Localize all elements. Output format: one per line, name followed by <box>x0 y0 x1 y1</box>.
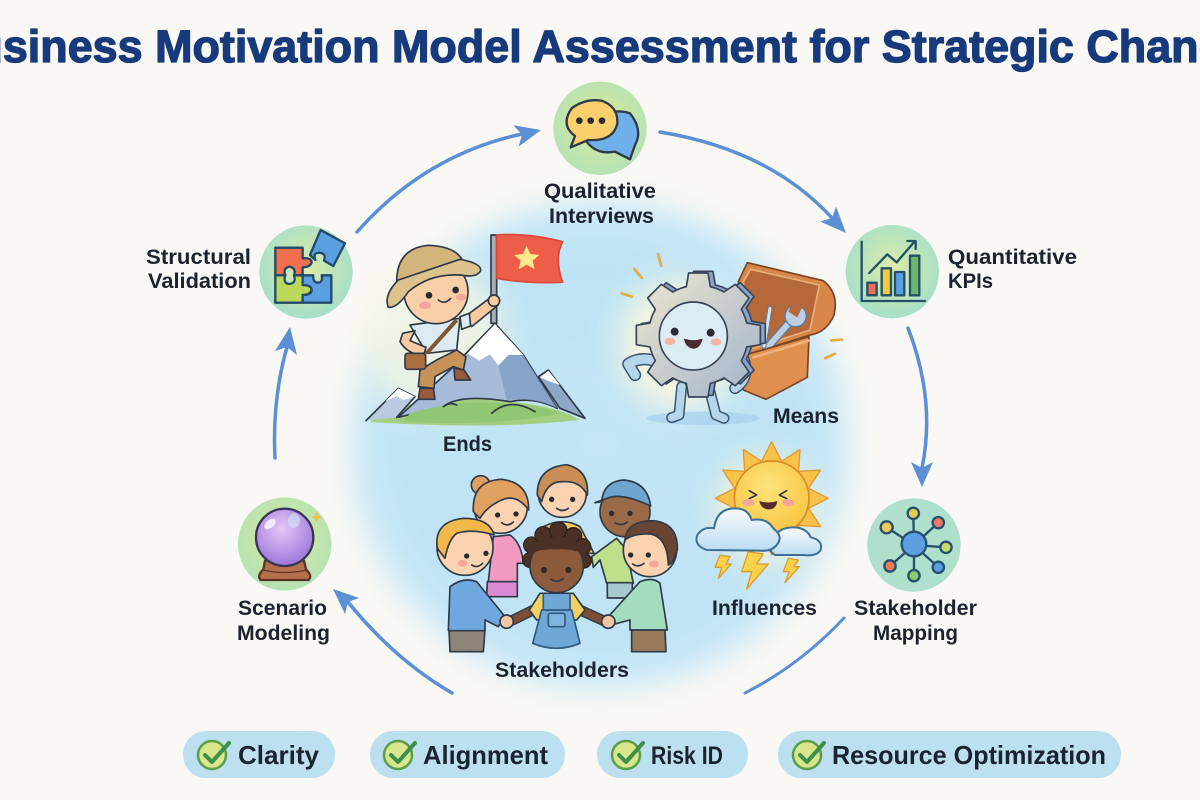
child with curly hair and overalls <box>512 522 603 648</box>
label: quantitative KPIs: KPIs <box>948 269 993 293</box>
illustration: group of children holding hands (Stakeholders) <box>437 465 677 652</box>
label: stakeholder mapping: Stakeholder <box>854 596 978 620</box>
benefit pill: resource optimization: Resource Optimization <box>832 740 1106 770</box>
child with blue cap <box>592 480 651 598</box>
label: scenario modeling: Scenario <box>238 596 327 620</box>
icon: stakeholder network <box>867 498 961 592</box>
boy in mint shirt <box>608 521 677 652</box>
benefit pill: clarity <box>183 731 335 778</box>
label: qualitative interviews: Qualitative <box>544 179 656 203</box>
girl with hair bun <box>471 476 529 597</box>
label: influences: Influences <box>712 596 817 620</box>
arrow: stakeholder mapping to scenario modeling left segment <box>333 589 452 693</box>
label: stakeholders: Stakeholders <box>495 658 629 682</box>
label: structural validation: Structural <box>146 245 251 269</box>
benefit pill: alignment <box>370 731 565 778</box>
benefit pill: resource optimization <box>778 731 1121 778</box>
label: means: Means <box>773 404 839 428</box>
benefit pill: alignment: Alignment <box>423 740 548 770</box>
arrow: scenario modeling to structural validation <box>274 327 297 458</box>
benefit pill: risk ID <box>597 731 748 778</box>
boy with yellow shirt <box>537 465 594 553</box>
icon: puzzle <box>259 225 353 319</box>
label: qualitative interviews <box>544 179 656 228</box>
label: stakeholder mapping <box>854 596 978 645</box>
illustration: gear with toolbox (Means) <box>620 253 843 425</box>
illustration: sun and storm clouds (Influences) <box>696 442 828 589</box>
central watercolor blob <box>350 200 850 690</box>
icon: crystal ball <box>238 497 331 591</box>
icon: speech bubbles <box>553 82 647 175</box>
arrow: stakeholder mapping to scenario modeling right segment <box>745 618 844 693</box>
label: stakeholder mapping: Mapping <box>873 621 958 645</box>
label: quantitative KPIs: Quantitative <box>948 245 1077 269</box>
label: scenario modeling <box>237 596 330 645</box>
benefit pill: clarity: Clarity <box>238 740 320 770</box>
label: structural validation <box>146 245 251 293</box>
icon: bar chart <box>846 225 939 318</box>
label: ends: Ends <box>443 432 492 456</box>
arrow: structural validation to qualitative interviews <box>357 125 541 232</box>
arrow: qualitative interviews to quantitative KPIs <box>660 132 846 233</box>
label: scenario modeling: Modeling <box>237 621 330 645</box>
blonde boy in blue <box>437 518 505 652</box>
label: structural validation: Validation <box>148 269 251 293</box>
label: quantitative KPIs <box>948 245 1077 293</box>
label: qualitative interviews: Interviews <box>549 204 654 228</box>
arrow: quantitative KPIs to stakeholder mapping <box>908 328 933 487</box>
benefit pill: risk ID: Risk ID <box>651 742 723 770</box>
illustration: explorer on mountain (Ends) <box>366 235 585 426</box>
